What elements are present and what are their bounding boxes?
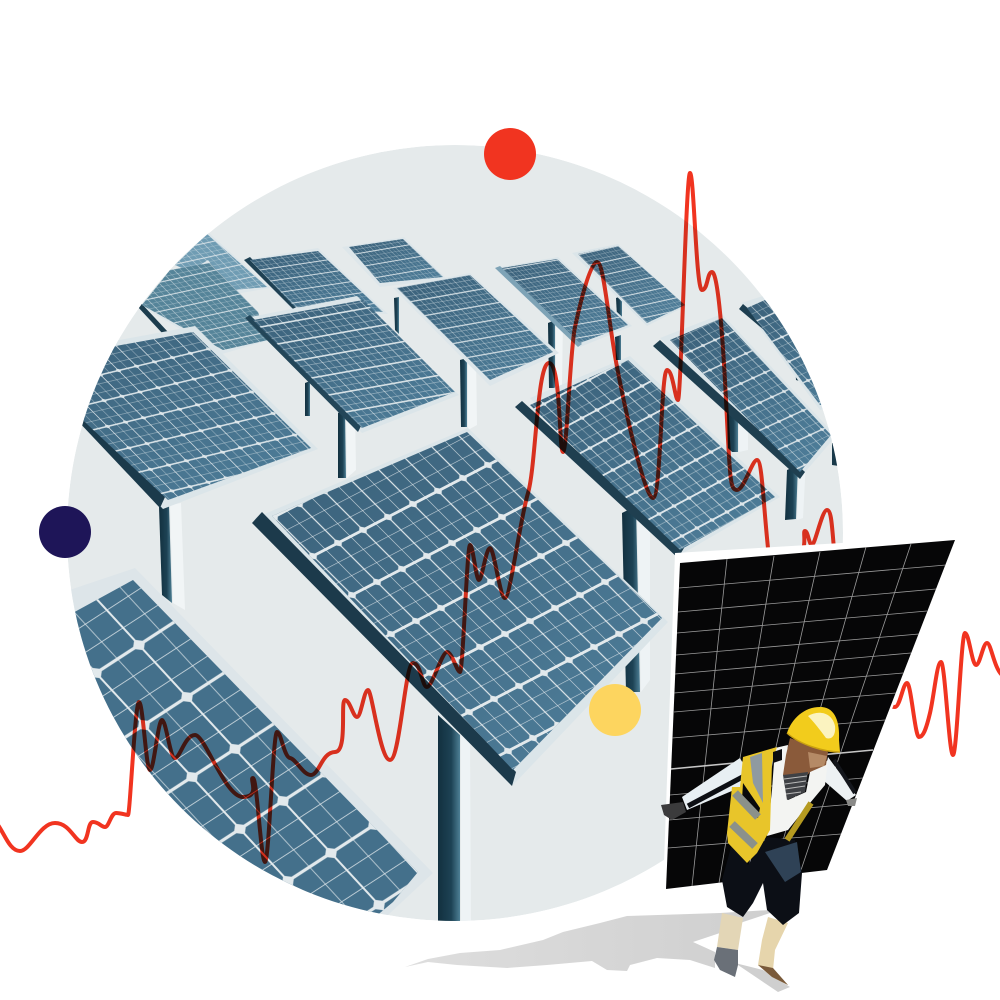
accent dot: yellow xyxy=(589,684,641,736)
yellow safety vest xyxy=(727,747,811,863)
panel grid lines xyxy=(668,544,946,886)
left arm with sleeve xyxy=(661,758,753,820)
panel: upper middle xyxy=(245,296,459,433)
right arm with sleeve xyxy=(823,757,857,806)
worker figure xyxy=(661,707,857,985)
accent dot: red xyxy=(484,128,536,180)
panel: back row second xyxy=(244,251,383,312)
panel: far right back small xyxy=(572,244,686,326)
large solar panel carried by worker xyxy=(663,536,958,892)
panel: large centre xyxy=(252,428,668,786)
red line chart xyxy=(0,173,1000,862)
striped undershirt xyxy=(783,772,808,800)
panel: far right edge xyxy=(739,296,823,410)
face and neck xyxy=(783,738,828,778)
panel: bottom left xyxy=(71,580,418,915)
panel: far back left xyxy=(175,233,267,290)
panel: right back small xyxy=(495,257,632,347)
panel: right upper xyxy=(653,314,836,479)
circular backdrop with solar panel field xyxy=(68,145,843,921)
panel: centre back xyxy=(393,273,559,386)
right boot xyxy=(758,917,788,985)
white shirt xyxy=(767,745,828,836)
support poles xyxy=(159,296,839,921)
accent dot: navy xyxy=(39,506,91,558)
panel: left mid back xyxy=(137,260,270,354)
panel: left large xyxy=(82,326,318,509)
panel: back row third xyxy=(349,239,443,283)
left boot xyxy=(714,913,743,977)
hard hat xyxy=(787,707,840,752)
panel: right centre xyxy=(515,356,780,558)
backdrop circle xyxy=(67,145,843,921)
trousers xyxy=(722,837,802,925)
ground shadow xyxy=(405,910,790,992)
